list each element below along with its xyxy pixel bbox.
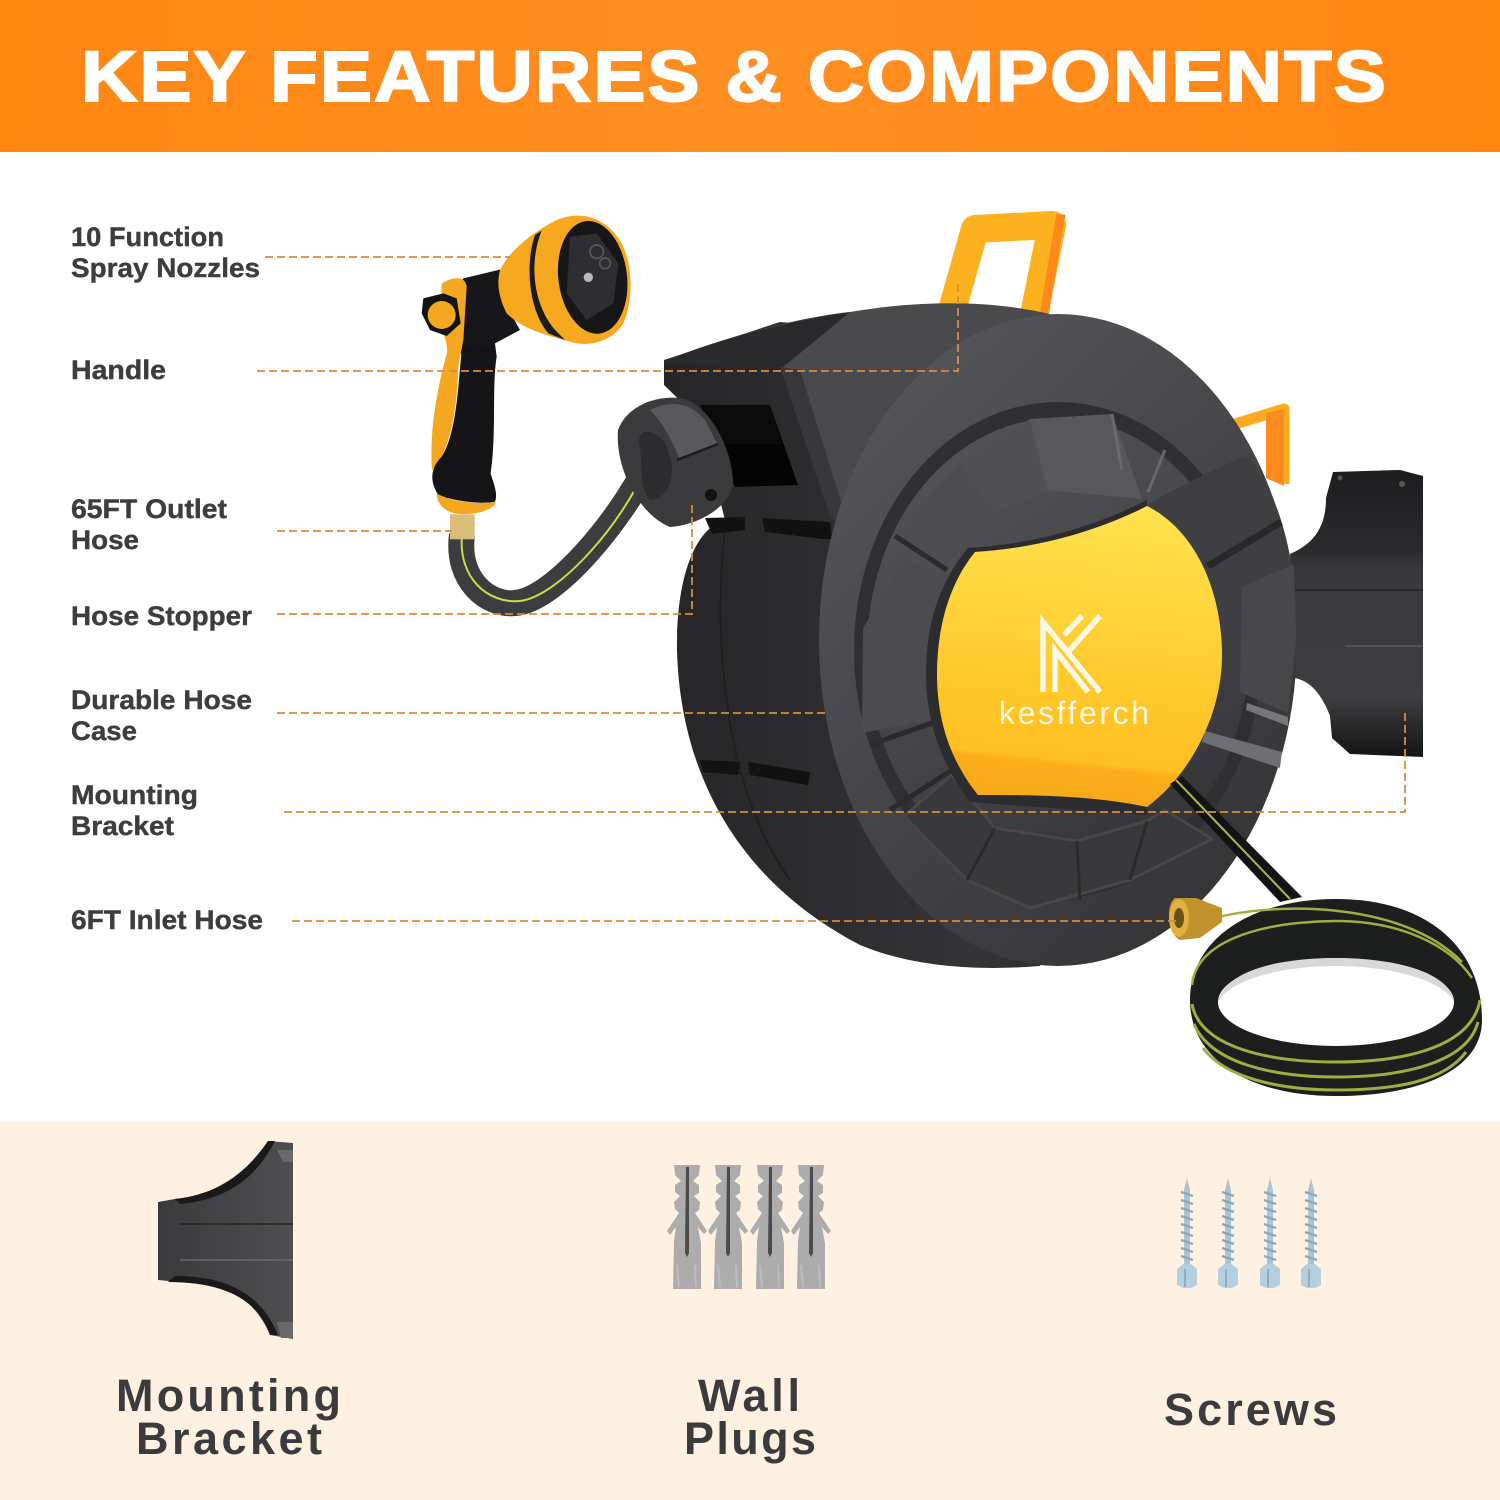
caption: mounting bracket: Mounting <box>116 1370 341 1421</box>
caption: mounting bracket: Bracket <box>136 1413 322 1464</box>
label: durable hose case <box>71 685 252 746</box>
caption: screws: Screws <box>1164 1384 1337 1435</box>
lower ring segments <box>904 775 1212 908</box>
outlet hose <box>461 466 647 603</box>
label: mounting bracket: Mounting <box>71 780 198 810</box>
wall mounting bracket on reel <box>1290 470 1423 757</box>
label: hose stopper: Hose Stopper <box>71 601 253 631</box>
black grip <box>432 347 497 503</box>
caption: wall plugs: Plugs <box>684 1413 816 1464</box>
icon: mounting bracket <box>158 1141 293 1339</box>
head cone <box>498 216 631 344</box>
hood top <box>664 303 1050 540</box>
label: durable hose case: Case <box>71 716 137 746</box>
spray nozzle <box>422 216 634 539</box>
inlet hose and coil <box>1169 776 1482 1096</box>
label: 10 function spray nozzles: 10 Function <box>71 222 224 252</box>
coil opening <box>1218 958 1454 1046</box>
caption: mounting bracket <box>116 1370 341 1464</box>
outer face <box>819 314 1297 966</box>
label: durable hose case: Durable Hose <box>71 685 252 715</box>
label: mounting bracket <box>71 780 198 841</box>
hose case body <box>664 303 1297 968</box>
label: 10 function spray nozzles <box>71 222 260 283</box>
label: 6ft inlet hose: 6FT Inlet Hose <box>71 905 263 935</box>
label: 10 function spray nozzles: Spray Nozzles <box>71 253 260 283</box>
yellow collar <box>437 493 496 514</box>
icon: wall plugs <box>667 1165 831 1289</box>
accessories panel <box>0 1122 1500 1500</box>
grip neck <box>450 268 520 357</box>
upper right dark wedge <box>1147 456 1296 680</box>
side handle of reel <box>1222 409 1284 486</box>
yellow cover with logo <box>937 506 1222 807</box>
hose stopper knob <box>618 398 733 527</box>
groove around cover <box>926 500 1147 815</box>
nozzle face <box>552 217 634 338</box>
icon: screws <box>1177 1178 1321 1288</box>
label: handle: Handle <box>71 355 166 385</box>
rear case <box>664 322 1180 968</box>
callout leader lines <box>257 257 1405 921</box>
title: KEY FEATURES & COMPONENTS <box>81 38 1388 117</box>
caption: wall plugs <box>684 1370 816 1464</box>
label: 65ft outlet hose: Hose <box>71 525 139 555</box>
caption: wall plugs: Wall <box>698 1370 800 1421</box>
trigger dial <box>422 293 461 336</box>
coil <box>1190 899 1482 1096</box>
inner ring recess <box>854 402 1262 898</box>
back handle of reel <box>952 214 1061 316</box>
light stripes <box>1246 703 1288 726</box>
slots <box>705 517 832 540</box>
brass fitting <box>1169 898 1222 940</box>
ring segments <box>960 419 1047 513</box>
label: 65ft outlet hose <box>71 494 227 555</box>
metal band <box>530 231 565 340</box>
brand name: kesfferch <box>999 695 1149 731</box>
brass fitting <box>450 514 475 539</box>
logo mark <box>1043 616 1100 692</box>
header banner <box>0 0 1500 152</box>
yellow handle spine <box>431 278 467 471</box>
hood opening <box>700 405 798 487</box>
label: 65ft outlet hose: 65FT Outlet <box>71 494 227 524</box>
label: mounting bracket: Bracket <box>71 811 174 841</box>
